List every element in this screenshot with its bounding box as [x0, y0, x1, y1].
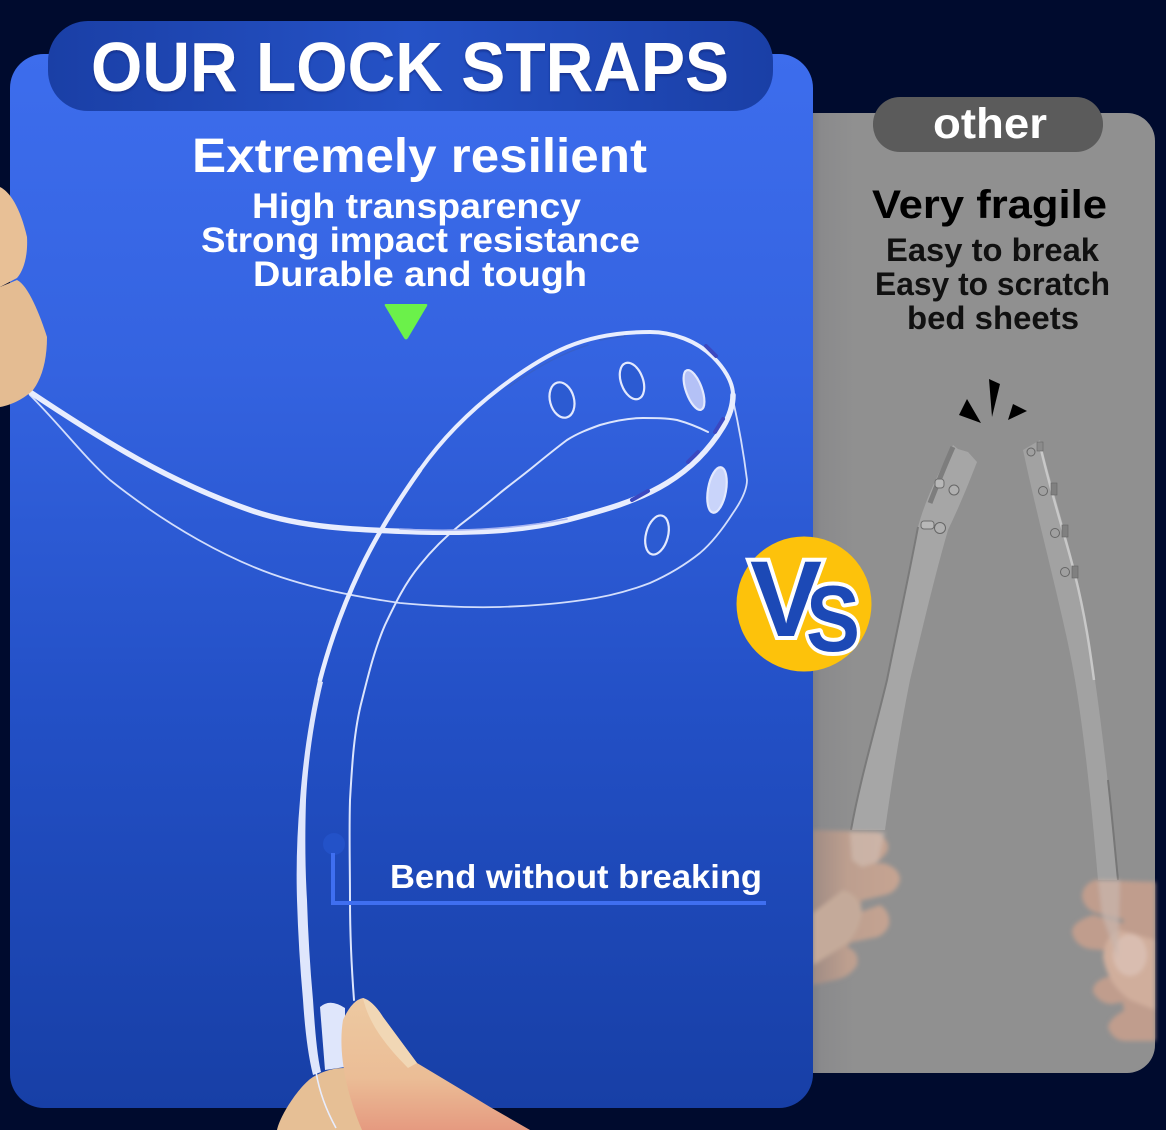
text: other strap weaknesses: bed sheets — [907, 300, 1079, 336]
callout: bend without breaking: Bend without breaking — [390, 858, 762, 895]
label pill: other — [873, 97, 1103, 152]
panel: our lock straps — [10, 54, 813, 1108]
icon: green arrow — [385, 304, 427, 340]
icon: crack marks — [959, 379, 1027, 423]
icon: VS badge: S — [806, 566, 860, 671]
panel: other strap comparison — [780, 113, 1155, 1073]
text: strap benefits: Durable and tough — [253, 255, 587, 294]
icon: broken right strap — [1023, 440, 1118, 880]
title banner: OUR LOCK STRAPS — [91, 28, 729, 106]
icon: left hand holding strap — [813, 830, 900, 985]
label pill: other: other — [933, 100, 1047, 148]
text: strap benefits: High transparency — [252, 187, 582, 226]
text: other strap weaknesses: Very fragile — [872, 183, 1107, 227]
icon: broken left strap — [851, 445, 977, 830]
icon: left fingers — [0, 187, 47, 407]
text: strap benefits — [192, 130, 647, 294]
icon: VS badge — [736, 536, 872, 672]
text: other strap weaknesses: Easy to scratch — [875, 266, 1110, 302]
icon: bent transparent strap — [30, 332, 747, 1075]
icon: bottom fingers and strap end — [277, 998, 530, 1130]
icon: VS badge: V — [750, 538, 822, 659]
text: other strap weaknesses — [872, 183, 1110, 336]
callout: bend without breaking — [323, 833, 766, 903]
text: strap benefits: Strong impact resistance — [201, 221, 640, 260]
icon: right hand holding strap — [1072, 880, 1155, 1041]
text: other strap weaknesses: Easy to break — [886, 232, 1099, 268]
icon: strap holes — [546, 359, 730, 557]
text: strap benefits: Extremely resilient — [192, 130, 647, 183]
